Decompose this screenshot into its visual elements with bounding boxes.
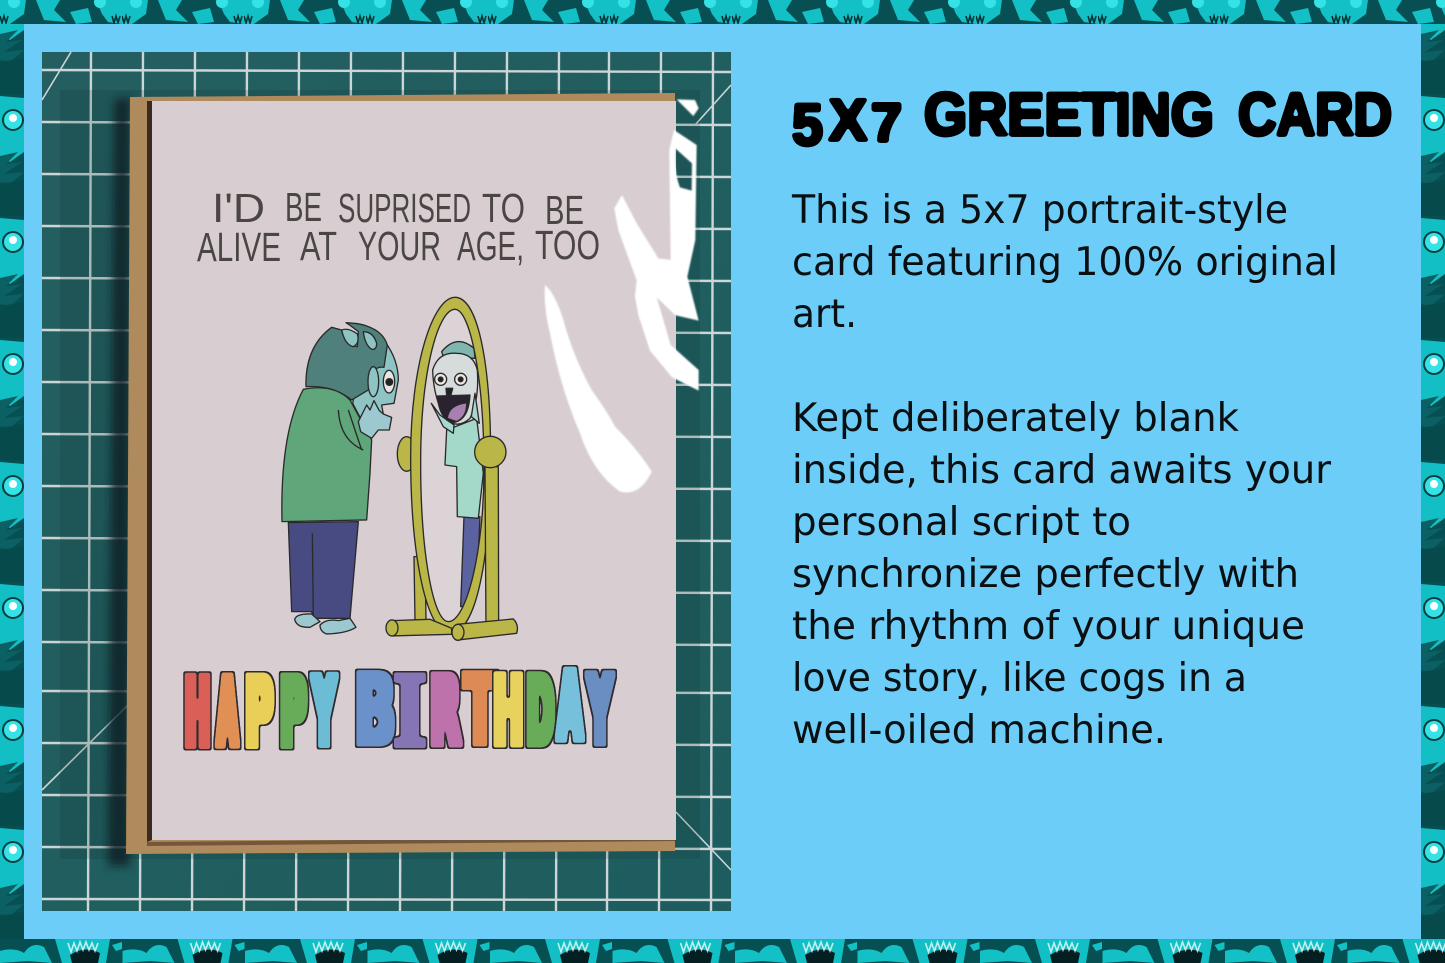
- reflection: [431, 342, 483, 607]
- zombie hands and feet: [295, 401, 392, 634]
- text block: description paragraph: personal script to: [792, 500, 1131, 545]
- mirror back post and knob: [414, 557, 426, 620]
- lettering: HAPPY BIRTHDAY: P: [280, 657, 306, 769]
- envelope shadow: [108, 97, 130, 866]
- mirror glass: [416, 305, 484, 625]
- lettering: HAPPY BIRTHDAY: P: [245, 657, 273, 769]
- photo: greeting card on cutting mat: [42, 52, 731, 911]
- text block: description paragraph: synchronize perfectly with: [792, 552, 1299, 597]
- lettering: HAPPY BIRTHDAY: I: [394, 651, 426, 768]
- white card: [152, 101, 676, 840]
- mirror frame: [411, 297, 491, 633]
- text block: description paragraph: the rhythm of your unique: [792, 604, 1305, 649]
- card message: AGE,: [457, 223, 524, 269]
- white card: Y: [587, 654, 613, 766]
- text block: description paragraph: Kept deliberately blank: [792, 396, 1239, 441]
- lettering: HAPPY BIRTHDAY: [185, 651, 613, 769]
- zombie sweater: [282, 388, 372, 522]
- text block: intro paragraph: This is a 5x7 portrait-style: [791, 188, 1288, 233]
- title: GREETING: [924, 81, 1214, 148]
- card message: ALIVE: [197, 224, 281, 270]
- card message: YOUR: [358, 223, 441, 269]
- plastic glare highlights: [545, 99, 699, 492]
- lettering: HAPPY BIRTHDAY: H: [493, 655, 523, 767]
- zombie trousers: [288, 522, 358, 618]
- card message: TO: [482, 185, 525, 231]
- card message: BE: [545, 187, 584, 233]
- title: 5: [792, 93, 823, 158]
- lettering: HAPPY BIRTHDAY: B: [354, 654, 396, 766]
- card message: BE: [285, 184, 322, 230]
- title: X: [829, 88, 867, 153]
- card message: AT: [300, 223, 337, 269]
- text block: description paragraph: inside, this card awaits your: [792, 448, 1332, 493]
- title: [792, 81, 1392, 158]
- lettering: HAPPY BIRTHDAY: Y: [312, 656, 336, 768]
- lettering: HAPPY BIRTHDAY: H: [185, 657, 210, 769]
- title: 7: [871, 93, 902, 153]
- plastic sleeve: [60, 90, 700, 859]
- text block: description paragraph: love story, like cogs in a: [792, 656, 1247, 701]
- card message: TOO: [535, 222, 600, 268]
- lettering: HAPPY BIRTHDAY: A: [558, 651, 582, 763]
- kraft envelope: [126, 93, 675, 854]
- card message: I'D: [212, 185, 265, 231]
- card message: SUPRISED: [338, 185, 471, 231]
- card message: [197, 184, 600, 270]
- illustration: zombie and mirror: [282, 297, 517, 640]
- lettering: HAPPY BIRTHDAY: T: [464, 654, 496, 766]
- text block: intro paragraph: card featuring 100% original: [792, 240, 1338, 285]
- mirror stand: [386, 436, 517, 640]
- text block: description paragraph: [792, 396, 1332, 753]
- lettering: HAPPY BIRTHDAY: D: [527, 655, 554, 767]
- zombie head: [306, 323, 398, 430]
- lettering: HAPPY BIRTHDAY: R: [430, 655, 461, 767]
- text block: description paragraph: well-oiled machine.: [792, 708, 1166, 753]
- lettering: HAPPY BIRTHDAY: A: [218, 657, 237, 769]
- title: CARD: [1238, 81, 1392, 148]
- text block: intro paragraph: [791, 188, 1338, 337]
- text block: intro paragraph: art.: [792, 292, 857, 337]
- cutting mat: [42, 52, 731, 911]
